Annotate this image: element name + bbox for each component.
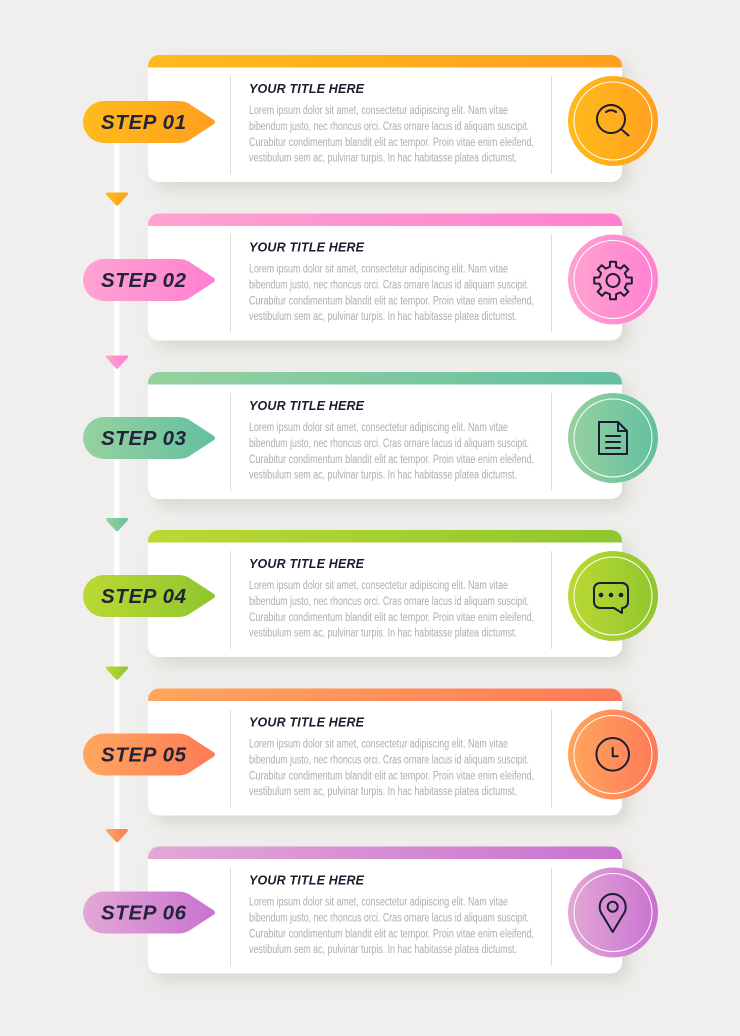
icon ring	[574, 874, 652, 952]
icon: magnifier	[597, 105, 628, 136]
icon ring	[574, 399, 652, 477]
body text: bibendum justo, nec rhoncus orci. Cras ornare lacus id aliquam suscipit.	[249, 912, 529, 924]
badge	[83, 101, 215, 143]
title: YOUR TITLE HERE	[249, 557, 365, 571]
body text: bibendum justo, nec rhoncus orci. Cras ornare lacus id aliquam suscipit.	[249, 280, 529, 292]
title: YOUR TITLE HERE	[249, 874, 365, 888]
left divider	[230, 551, 231, 649]
panel: step 03	[83, 372, 658, 499]
right divider	[551, 393, 552, 491]
body text: vestibulum sem ac, pulvinar turpis. In hac habitasse platea dictumst.	[249, 311, 517, 323]
body text: bibendum justo, nec rhoncus orci. Cras ornare lacus id aliquam suscipit.	[249, 596, 529, 608]
header bar	[148, 55, 622, 68]
icon: clock	[596, 738, 629, 771]
card	[148, 214, 622, 340]
body text: vestibulum sem ac, pulvinar turpis. In hac habitasse platea dictumst.	[249, 470, 517, 482]
arrow: step 5 to 6	[106, 829, 128, 842]
body text: Curabitur condimentum blandit elit ac tempor. Proin vitae enim eleifend,	[249, 928, 534, 940]
icon circle	[568, 76, 658, 166]
icon circle	[568, 551, 658, 641]
icon ring	[574, 240, 652, 318]
icon circle	[568, 710, 658, 800]
body text: vestibulum sem ac, pulvinar turpis. In hac habitasse platea dictumst.	[249, 152, 517, 164]
title: YOUR TITLE HERE	[249, 82, 365, 96]
body text: Curabitur condimentum blandit elit ac tempor. Proin vitae enim eleifend,	[249, 454, 534, 466]
body text: vestibulum sem ac, pulvinar turpis. In hac habitasse platea dictumst.	[249, 944, 517, 956]
badge	[83, 734, 215, 776]
body text: bibendum justo, nec rhoncus orci. Cras ornare lacus id aliquam suscipit.	[249, 438, 529, 450]
card	[148, 55, 622, 182]
icon ring	[574, 716, 652, 794]
left divider	[230, 76, 231, 174]
arrow: step 4 to 5	[106, 666, 128, 680]
body text	[249, 580, 534, 640]
icon: document	[599, 422, 627, 454]
right divider	[551, 868, 552, 966]
body text	[249, 896, 534, 956]
card	[148, 372, 622, 499]
arrow: step 1 to 2	[106, 192, 128, 206]
right divider	[551, 76, 552, 174]
body text: vestibulum sem ac, pulvinar turpis. In hac habitasse platea dictumst.	[249, 628, 517, 640]
header bar	[148, 530, 622, 542]
icon ring	[574, 557, 652, 635]
arrow: step 2 to 3	[106, 356, 128, 369]
right divider	[551, 710, 552, 808]
body text	[249, 264, 534, 323]
badge label: STEP 04	[101, 585, 187, 608]
body text: Curabitur condimentum blandit elit ac tempor. Proin vitae enim eleifend,	[249, 137, 534, 149]
header bar	[148, 372, 622, 384]
body text: Lorem ipsum dolor sit amet, consectetur adipiscing elit. Nam vitae	[249, 264, 508, 276]
body text: Lorem ipsum dolor sit amet, consectetur adipiscing elit. Nam vitae	[249, 422, 508, 434]
body text: Lorem ipsum dolor sit amet, consectetur adipiscing elit. Nam vitae	[249, 580, 508, 592]
body text	[249, 738, 534, 798]
badge label: STEP 01	[101, 111, 186, 134]
body text	[249, 105, 534, 164]
icon: location pin	[600, 894, 626, 932]
icon: chat bubble	[594, 583, 628, 613]
panel: step 01	[83, 55, 658, 182]
panel: step 06	[83, 846, 658, 974]
icon circle	[568, 868, 658, 958]
title: YOUR TITLE HERE	[249, 399, 365, 413]
badge	[83, 575, 215, 617]
card	[148, 688, 622, 816]
body text: vestibulum sem ac, pulvinar turpis. In hac habitasse platea dictumst.	[249, 786, 517, 798]
panel: step 04	[83, 530, 658, 657]
body text: bibendum justo, nec rhoncus orci. Cras ornare lacus id aliquam suscipit.	[249, 121, 529, 133]
timeline vertical line	[114, 140, 120, 895]
body text: bibendum justo, nec rhoncus orci. Cras ornare lacus id aliquam suscipit.	[249, 754, 529, 766]
badge	[83, 417, 215, 459]
header bar	[148, 688, 622, 701]
badge	[83, 892, 215, 934]
header bar	[148, 846, 622, 859]
header bar	[148, 214, 622, 226]
card	[148, 530, 622, 657]
icon circle	[568, 393, 658, 483]
left divider	[230, 710, 231, 808]
badge label: STEP 02	[101, 269, 187, 292]
title: YOUR TITLE HERE	[249, 240, 365, 254]
panel: step 02	[83, 214, 658, 340]
body text: Lorem ipsum dolor sit amet, consectetur adipiscing elit. Nam vitae	[249, 105, 508, 117]
badge label: STEP 03	[101, 427, 187, 450]
panel: step 05	[83, 688, 658, 816]
card	[148, 846, 622, 974]
right divider	[551, 551, 552, 649]
arrow: step 3 to 4	[106, 518, 128, 531]
badge label: STEP 05	[101, 744, 187, 766]
left divider	[230, 868, 231, 966]
body text: Curabitur condimentum blandit elit ac tempor. Proin vitae enim eleifend,	[249, 612, 534, 624]
left divider	[230, 393, 231, 491]
body text: Lorem ipsum dolor sit amet, consectetur adipiscing elit. Nam vitae	[249, 896, 508, 908]
body text: Curabitur condimentum blandit elit ac tempor. Proin vitae enim eleifend,	[249, 296, 534, 308]
body text: Lorem ipsum dolor sit amet, consectetur adipiscing elit. Nam vitae	[249, 738, 508, 750]
badge	[83, 259, 215, 301]
body text: Curabitur condimentum blandit elit ac tempor. Proin vitae enim eleifend,	[249, 770, 534, 782]
badge label: STEP 06	[101, 902, 187, 924]
icon circle	[568, 234, 658, 324]
body text	[249, 422, 534, 482]
left divider	[230, 234, 231, 332]
icon ring	[574, 82, 652, 160]
title: YOUR TITLE HERE	[249, 716, 365, 730]
right divider	[551, 234, 552, 332]
icon: gear	[594, 262, 632, 299]
